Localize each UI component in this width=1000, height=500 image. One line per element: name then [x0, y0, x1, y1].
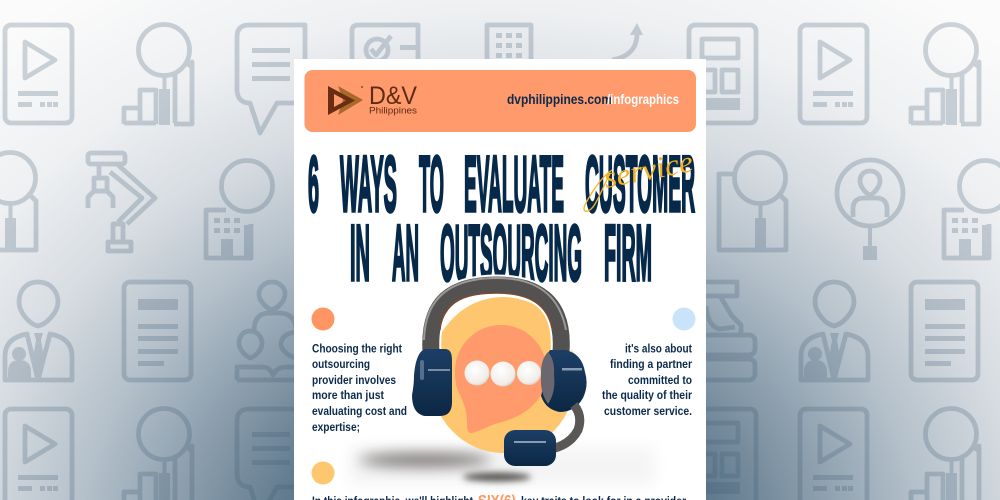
icon: D&V logo: D&V [369, 82, 417, 110]
text block: left paragraph: expertise; [312, 420, 360, 434]
icon: document right [911, 282, 978, 380]
yellow circle [430, 297, 576, 453]
icon: magnifier building [206, 160, 272, 259]
script word: service [584, 145, 696, 211]
microphone boom [551, 405, 580, 449]
title: EVALUATE [464, 139, 564, 228]
icon: form layout row 1 [689, 25, 756, 123]
icon: D&V logo [328, 82, 417, 116]
panel: orange header bar [304, 70, 696, 132]
icon: magnifier chart row 4 [124, 408, 192, 500]
text block: left paragraph: evaluating cost and [312, 404, 407, 418]
icon: person in suit right [801, 282, 868, 380]
headband [424, 278, 566, 352]
icon: speech bubble row 1 [237, 25, 305, 133]
text block: right paragraph: customer service. [604, 404, 692, 418]
icon: magnifier chart right row 1 [911, 24, 979, 125]
title [308, 139, 695, 297]
icon: video document right row 4 [800, 409, 867, 500]
icon: document left [124, 282, 191, 380]
website url: dvphilippines.com [507, 92, 612, 107]
text block: left paragraph: provider involves [312, 373, 396, 387]
text block: left paragraph [312, 342, 407, 434]
icon: magnifier box right [719, 152, 786, 250]
text: FIRM [604, 208, 652, 297]
title: AN [392, 208, 419, 297]
icon: video document right row 1 [800, 25, 867, 123]
illustration: headset and chat bubble [350, 278, 655, 485]
icon: D&V logo: Philippines [369, 106, 417, 116]
icon: office building [487, 25, 531, 60]
icon: checklist [352, 25, 418, 61]
icon: magnifier chart row 1 [124, 24, 192, 125]
text block: left paragraph: Choosing the right [312, 342, 402, 356]
text block: left paragraph: outsourcing [312, 357, 370, 371]
text block: right paragraph [602, 342, 692, 418]
website url [507, 92, 679, 107]
icon: team group [237, 282, 296, 380]
text block: intro sentence [312, 493, 686, 500]
microphone pad [504, 430, 556, 466]
title: WAYS [340, 139, 397, 228]
icon: magnifier box left [0, 152, 36, 250]
bullet: yellow dot [312, 462, 334, 484]
icon: magnifier building right [944, 160, 1000, 259]
icon: form layout row 4 [689, 409, 756, 500]
title: TO [419, 139, 444, 228]
bullet: blue dot [672, 308, 696, 330]
text block: left paragraph: more than just [312, 388, 384, 402]
icon: robot arm [88, 153, 155, 251]
title: IN [350, 208, 370, 297]
right ear pad [541, 350, 587, 412]
icon: speech bubble row 4 [237, 409, 305, 500]
icon: rising arrow [612, 23, 643, 60]
icon: magnifier chart right row 4 [911, 408, 979, 500]
text block: right paragraph: committed to [628, 373, 692, 387]
title: 6 [308, 139, 319, 228]
left ear pad [412, 349, 452, 416]
script word: service: service [601, 145, 696, 195]
panel: white infographic card [294, 59, 706, 500]
icon: video document row 4 [5, 409, 72, 500]
icon: video document row 1 [5, 25, 72, 123]
icon: person in suit left [5, 282, 72, 380]
three dots [464, 360, 541, 386]
chat bubble [455, 325, 547, 433]
text block: right paragraph: finding a partner [610, 357, 692, 371]
ground shadows [350, 447, 655, 485]
icon: magnifier person [837, 160, 903, 260]
text block: right paragraph: it's also about [625, 342, 692, 356]
text block: right paragraph: the quality of their [602, 388, 692, 402]
website url: /infographics [607, 92, 679, 107]
icon: stamp and hand [700, 282, 755, 380]
bullet: orange dot [312, 308, 334, 330]
